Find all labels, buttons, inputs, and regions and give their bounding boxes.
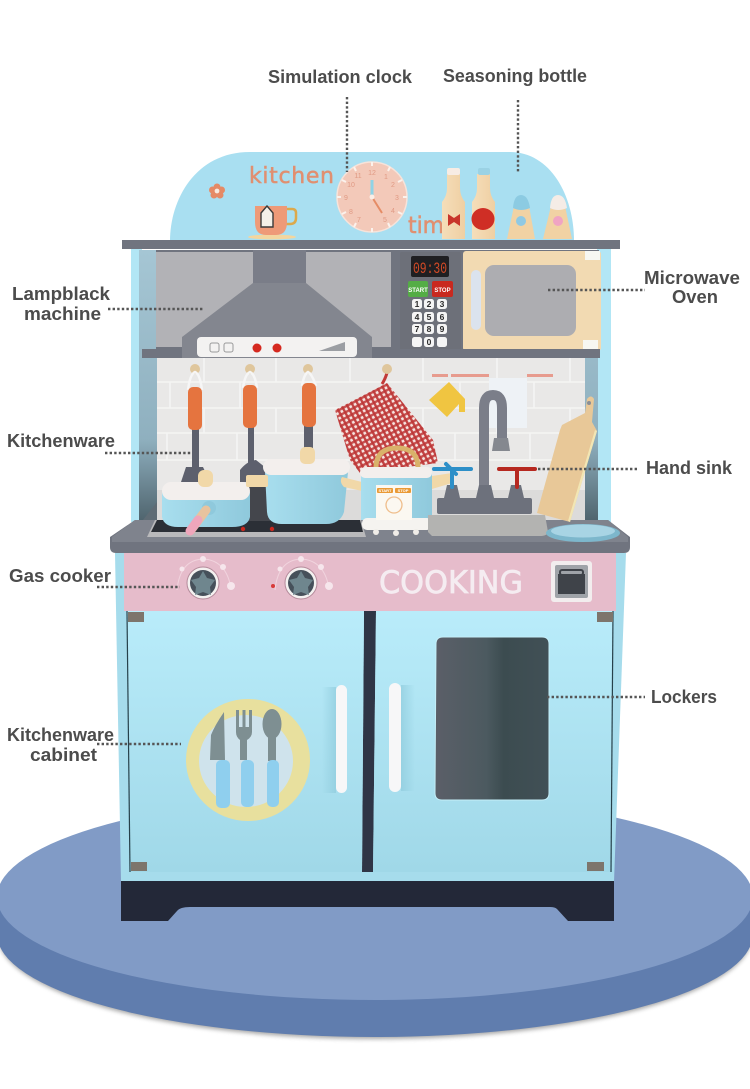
cooking pot with lid [246, 447, 362, 524]
icon: coffee cup [248, 206, 296, 240]
upper frame [131, 248, 611, 525]
keypad: 1 [415, 299, 420, 309]
rice cooker [360, 448, 452, 536]
round display platform [0, 794, 750, 1039]
label: gas cooker: Gas cooker [9, 566, 111, 586]
cutlery plate decal [186, 699, 310, 821]
left gas knob [177, 556, 235, 599]
keypad: 3 [440, 299, 445, 309]
keypad: START [408, 288, 428, 294]
keypad: 2 [427, 299, 432, 309]
kitchen lettering: kitchen [249, 164, 334, 189]
top shelf [122, 240, 620, 249]
keypad: 0 [427, 337, 432, 347]
yellow sponge [429, 382, 465, 417]
leader: gas cooker [97, 586, 180, 588]
seasoning bottles [442, 168, 572, 239]
keypad: 8 [427, 324, 432, 334]
label: lockers: Lockers [651, 687, 717, 707]
cooking control panel [124, 553, 616, 611]
icon: oven [551, 561, 592, 602]
label: lampblack machine: Lampblack [12, 284, 111, 304]
leader: seasoning bottle [517, 100, 519, 172]
plinth base [121, 881, 614, 921]
label: kitchenware cabinet: cabinet [30, 745, 97, 765]
door: kitchenware cabinet [127, 611, 364, 872]
rice cooker: STOP [398, 488, 409, 493]
clock: 8 [349, 209, 353, 216]
keypad: 5 [427, 312, 432, 322]
backboard with decorations [170, 152, 574, 241]
keypad: 09:30 [413, 260, 447, 278]
clock: 2 [391, 182, 395, 189]
label: microwave oven: Microwave [644, 268, 740, 288]
leader: lockers [547, 696, 645, 698]
hand sink [428, 395, 548, 536]
clock: 3 [395, 195, 399, 202]
clock [337, 162, 407, 232]
plate [546, 524, 620, 542]
keypad: 7 [415, 324, 420, 334]
clock: 4 [391, 208, 395, 215]
clock: 11 [354, 173, 362, 180]
range hood back panel [156, 252, 391, 347]
leader: lampblack machine [108, 308, 203, 310]
clock: 1 [384, 174, 388, 181]
cooktop [147, 485, 366, 537]
leader: microwave oven [548, 289, 645, 291]
keypad [400, 252, 461, 350]
rice cooker: START [378, 488, 392, 493]
lower cabinet frame [115, 553, 626, 882]
oven mitt [335, 364, 438, 473]
door handle [322, 685, 347, 793]
right gas knob [271, 556, 333, 599]
keypad: STOP [434, 288, 451, 294]
leader: simulation clock [346, 97, 348, 172]
label: hand sink: Hand sink [646, 458, 733, 478]
clock: 7 [357, 217, 361, 224]
label: kitchenware cabinet [7, 725, 114, 765]
icon: flower [209, 184, 225, 198]
leader: kitchenware [105, 452, 192, 454]
clock: 9 [344, 195, 348, 202]
kitchenware: hanging utensils [181, 364, 316, 482]
label: kitchenware: Kitchenware [7, 431, 115, 451]
label: lampblack machine: machine [24, 304, 101, 324]
label: lampblack machine [12, 284, 111, 324]
COOKING lettering: COOKING [379, 565, 523, 601]
clock: 10 [347, 182, 355, 189]
label: microwave oven: Oven [672, 287, 718, 307]
middle shelf [142, 349, 600, 358]
toy kitchen [110, 152, 630, 921]
leader: kitchenware cabinet [97, 743, 181, 745]
range hood [182, 250, 372, 358]
clock: 5 [383, 217, 387, 224]
keypad: 6 [440, 312, 445, 322]
keypad: 9 [440, 324, 445, 334]
door: lockers [373, 611, 613, 872]
time lettering: tim [408, 213, 444, 239]
label: seasoning bottle: Seasoning bottle [443, 66, 587, 86]
pan with lid [162, 470, 250, 531]
cutting board [537, 396, 597, 522]
keypad: 4 [415, 312, 420, 322]
microwave oven [463, 251, 601, 351]
label: simulation clock: Simulation clock [268, 67, 413, 87]
label: kitchenware cabinet: Kitchenware [7, 725, 114, 745]
tiled wall [157, 358, 585, 520]
door hinges [128, 612, 613, 871]
door handle [389, 683, 415, 792]
counter top [110, 520, 630, 553]
door window [435, 637, 549, 800]
clock: 12 [368, 170, 376, 177]
leader: hand sink [538, 468, 637, 470]
cabinet centre gap [362, 611, 376, 872]
label: microwave oven [644, 268, 740, 307]
